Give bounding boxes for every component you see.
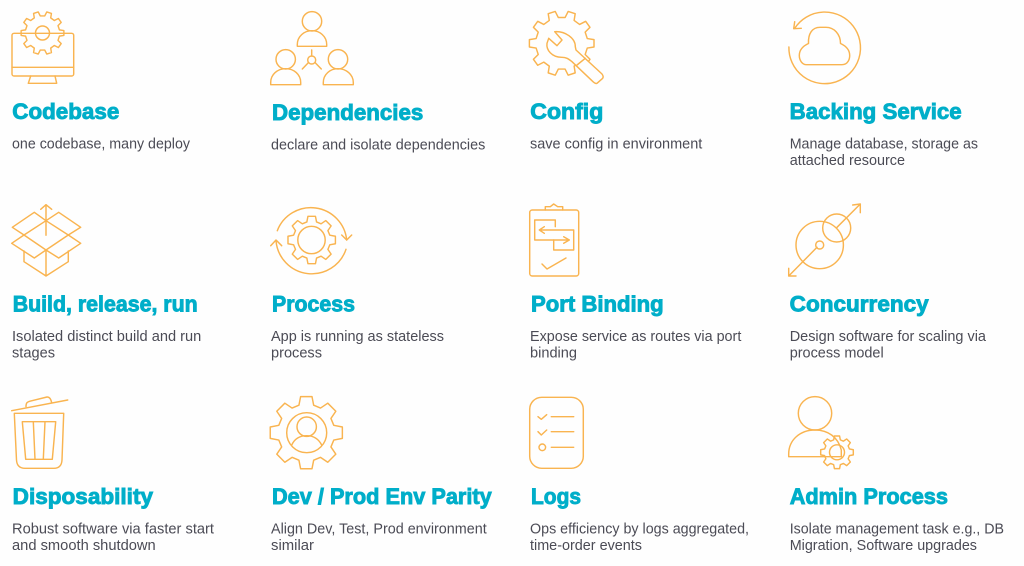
description: Admin Process: Isolate management task e.g., DB xyxy=(790,521,1004,537)
description: Disposability xyxy=(12,521,214,554)
description: Build, release, run xyxy=(12,329,201,362)
panel: Logs xyxy=(530,397,749,554)
description: Dependencies: declare and isolate dependencies xyxy=(271,138,485,154)
panel: Dependencies xyxy=(271,12,485,153)
panel: Concurrency xyxy=(789,204,987,362)
icon: overlapping circles with arrows xyxy=(789,204,860,276)
description: Process: App is running as stateless xyxy=(271,329,444,345)
description: Port Binding: binding xyxy=(530,346,577,362)
description: Port Binding: Expose service as routes via port xyxy=(530,329,741,345)
description: Admin Process: Migration, Software upgrades xyxy=(790,538,977,554)
description: Backing Service: attached resource xyxy=(790,153,905,169)
heading: Admin Process: Admin Process xyxy=(790,484,948,509)
description: Concurrency: Design software for scaling via xyxy=(790,329,987,345)
heading: Disposability: Disposability xyxy=(13,484,154,509)
description: Logs: Ops efficiency by logs aggregated, xyxy=(530,521,749,537)
icon: cloud in circular arrow xyxy=(789,12,860,84)
description: Disposability: Robust software via faster start xyxy=(12,521,214,537)
description: Codebase: one codebase, many deploy xyxy=(12,136,191,152)
description: Backing Service: Manage database, storage as xyxy=(790,136,978,152)
description: Admin Process xyxy=(790,521,1004,554)
panel: Dev / Prod Env Parity xyxy=(270,397,492,554)
icon: gear with person xyxy=(270,397,342,469)
panel: Port Binding xyxy=(530,204,741,362)
description: Config: save config in environment xyxy=(530,136,702,152)
icon: monitor with gear xyxy=(12,12,74,83)
heading: Process: Process xyxy=(272,292,355,317)
description: Dev / Prod Env Parity: similar xyxy=(271,538,314,554)
icon: gear with cycle arrows xyxy=(271,208,352,274)
heading: Build, release, run: Build, release, run xyxy=(13,292,198,317)
description: Concurrency xyxy=(790,329,987,362)
heading: Logs: Logs xyxy=(531,484,581,509)
heading: Config: Config xyxy=(530,99,603,124)
description: Concurrency: process model xyxy=(790,346,884,362)
panel: Process xyxy=(271,208,444,362)
description: Process: process xyxy=(271,346,322,362)
heading: Concurrency: Concurrency xyxy=(790,292,929,317)
description: Process xyxy=(271,329,444,362)
icon: person with gear xyxy=(789,397,853,469)
panel: Codebase xyxy=(12,12,191,153)
panel: Admin Process xyxy=(789,397,1004,554)
panel: Backing Service xyxy=(789,12,978,169)
description: Dev / Prod Env Parity: Align Dev, Test, Prod environment xyxy=(271,521,487,537)
icon: open box with arrow xyxy=(12,205,81,276)
icon: trash can xyxy=(12,397,68,468)
heading: Dev / Prod Env Parity: Dev / Prod Env Parity xyxy=(272,484,492,509)
description: Logs: time-order events xyxy=(530,538,642,554)
panel: Build, release, run xyxy=(12,205,201,362)
description: Disposability: and smooth shutdown xyxy=(12,538,156,554)
description: Build, release, run: stages xyxy=(12,346,55,362)
panel: Disposability xyxy=(12,397,214,554)
icon: clipboard with arrows xyxy=(530,204,579,276)
heading: Backing Service: Backing Service xyxy=(790,99,962,124)
heading: Port Binding: Port Binding xyxy=(531,292,664,317)
heading: Dependencies: Dependencies xyxy=(272,100,423,125)
description: Build, release, run: Isolated distinct build and run xyxy=(12,329,201,345)
icon: gear with wrench xyxy=(529,11,603,84)
panel: Config xyxy=(529,11,702,153)
description: Dev / Prod Env Parity xyxy=(271,521,487,554)
heading: Codebase: Codebase xyxy=(12,99,119,124)
icon: three people connected xyxy=(271,12,353,85)
description: Logs xyxy=(530,521,749,554)
description: Backing Service xyxy=(790,136,978,169)
icon: checklist xyxy=(530,397,583,468)
description: Port Binding xyxy=(530,329,741,362)
